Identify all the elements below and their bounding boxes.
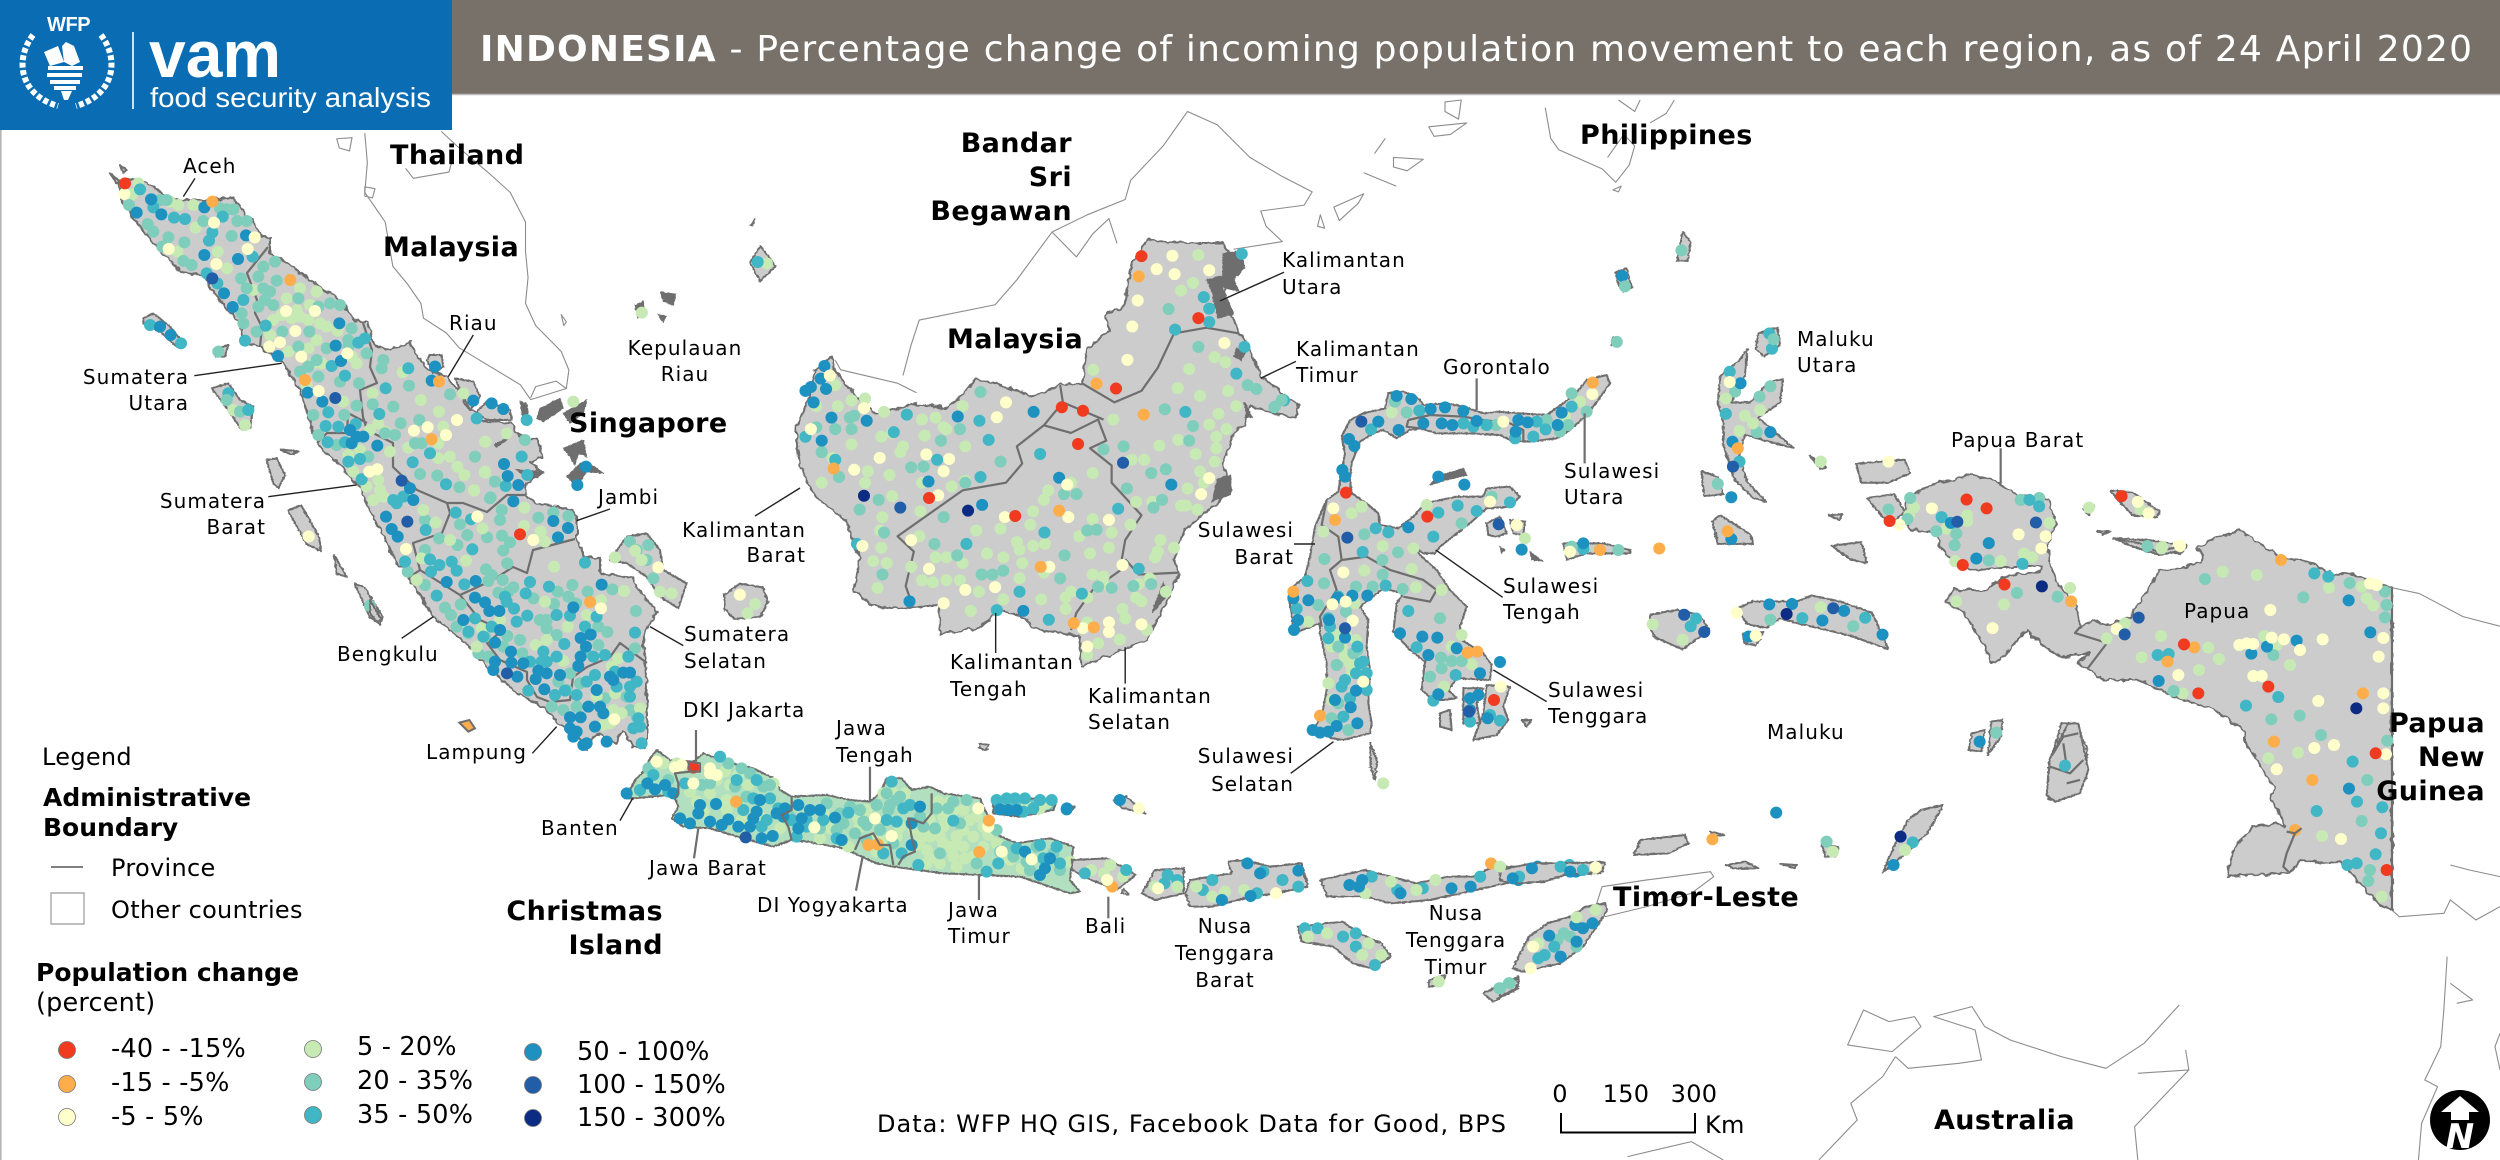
label: Malaysia east: Malaysia [947,324,1083,355]
Sangihe and Talaud islands [1612,268,1632,345]
label: Kalimantan Selatan: Selatan [1088,710,1171,734]
label: Papua Barat: Papua Barat [1951,428,2084,452]
label: Lampung: Lampung [426,740,527,764]
label: Sulawesi Tengah: Sulawesi [1503,574,1599,598]
Java small islands and Bali [979,743,1383,895]
legend subheading: Boundary [43,813,178,842]
label: Sumatera Barat: Barat [206,515,266,539]
region: Papua [1888,462,2392,910]
label: DKI Jakarta: DKI Jakarta [683,698,805,722]
label: Sulawesi Barat: Barat [1234,545,1294,569]
legend item: -15 to -5 [58,1068,230,1098]
label: Malaysia west: Malaysia [383,232,519,263]
label: Nusa Tenggara Barat: Nusa [1198,914,1252,938]
legend item: other countries [51,893,303,924]
label: Jawa Timur: Jawa [946,898,999,922]
legend item: 5 to 20 [304,1032,457,1062]
label: Christmas Island: Christmas [506,896,663,927]
label: Sulawesi Tenggara: Sulawesi [1548,678,1644,702]
label: Kalimantan Timur: Timur [1295,363,1359,387]
label: Kepulauan Riau: Kepulauan [628,336,742,360]
label: Sulawesi Utara: Utara [1564,485,1624,509]
label: Sumatera Utara: Utara [129,391,189,415]
label: Sumatera Selatan: Sumatera [684,622,790,646]
label: Aceh: Aceh [183,154,237,178]
label: Bandar Sri Begawan: Sri [1029,162,1072,193]
header: title band [452,0,2500,94]
label: Riau: Riau [449,311,498,335]
label: Kepulauan Riau: Riau [661,362,709,386]
scale bar: 150 [1603,1080,1649,1108]
scale bar: Km [1705,1111,1745,1139]
label: Nusa Tenggara Barat: Barat [1195,968,1255,992]
icon: WFP emblem wreath and wheat [23,35,111,106]
region: Sumatra [110,165,776,750]
legend item: other countries: Other countries [111,896,303,924]
header: WFP logo panel [0,0,452,130]
label: Timor-Leste: Timor-Leste [1613,882,1799,913]
label: Nusa Tenggara Timur: Timur [1424,955,1487,979]
label: Sumatera Utara: Sumatera [83,365,189,389]
legend: administrative boundary [42,743,303,924]
scale bar: 0 [1552,1080,1568,1108]
legend item: province: Province [111,854,216,882]
small islands west of Sumatra [110,165,298,488]
legend item: 50 to 100: 50 - 100% [577,1037,710,1067]
title: INDONESIA - Percentage change of incoming population movement to each region, as of 24 April 2020 [480,29,2472,70]
region: Sulawesi [1275,375,1630,740]
label: Sulawesi Barat: Sulawesi [1198,518,1294,542]
label: Papua: Papua [2184,599,2250,623]
population dots north Sumatra [124,183,490,503]
label: Maluku Utara: Utara [1797,353,1857,377]
icon: north arrow: N [2446,1117,2474,1157]
label: Sulawesi Selatan: Sulawesi [1198,744,1294,768]
icon: north arrow [2430,1090,2490,1157]
label: Gorontalo: Gorontalo [1443,355,1551,379]
label: Jawa Tengah: Jawa [834,716,887,740]
label: Kalimantan Barat: Kalimantan [682,518,806,542]
label: Papua New Guinea: Guinea [2376,776,2485,807]
legend item: 100 to 150: 100 - 150% [577,1070,726,1100]
label: Bandar Sri Begawan: Bandar [961,128,1072,159]
population dots south Sumatra [405,558,642,745]
legend item: 20 to 35: 20 - 35% [357,1066,473,1096]
label: Singapore: Singapore [569,408,728,439]
legend item: 35 to 50 [304,1100,473,1130]
label: Maluku: Maluku [1767,720,1845,744]
label: Kalimantan Utara: Kalimantan [1282,248,1406,272]
label: Sulawesi Utara: Sulawesi [1564,459,1660,483]
legend unit: (percent) [36,988,155,1018]
legend: population change [36,958,726,1133]
neighbouring countries outlines [337,100,2500,1160]
page frame line [0,130,2,1160]
label: DI Yogyakarta: DI Yogyakarta [757,893,909,917]
legend item: -5 to 5 [58,1102,204,1132]
label: Jawa Timur: Timur [947,924,1011,948]
region: Kalimantan [796,240,1299,666]
label: Nusa Tenggara Timur: Tenggara [1405,928,1506,952]
region: Java [625,750,1080,893]
label: Kalimantan Tengah: Tengah [949,677,1028,701]
label: Sumatera Selatan: Selatan [684,649,767,673]
label: Jawa Tengah: Tengah [835,743,914,767]
label: Sulawesi Tengah: Tengah [1502,600,1581,624]
data source: Data: WFP HQ GIS, Facebook Data for Good, BPS [877,1110,1506,1138]
Riau islands and Bangka [427,355,603,487]
vam wordmark: vam [149,17,281,91]
legend item: 150 to 300: 150 - 300% [577,1103,726,1133]
label: Papua New Guinea: Papua [2389,708,2485,739]
label: Thailand: Thailand [390,140,524,171]
label: Philippines: Philippines [1580,120,1753,151]
legend item: -40 to -15: -40 - -15% [111,1034,246,1064]
label: Nusa Tenggara Barat: Tenggara [1174,941,1275,965]
region: Maluku [1634,232,2087,873]
legend subheading: Administrative [43,783,251,812]
label: Kalimantan Selatan: Kalimantan [1088,684,1212,708]
label: Sumatera Barat: Sumatera [160,489,266,513]
label: Kalimantan Timur: Kalimantan [1296,337,1420,361]
label: Bandar Sri Begawan: Begawan [930,196,1072,227]
scale bar [1552,1080,1745,1139]
legend item: -15 to -5: -15 - -5% [111,1068,230,1098]
leader lines [183,178,2001,918]
WFP wordmark: WFP [47,14,90,36]
legend heading: Population change [36,958,299,987]
label: Sulawesi Tenggara: Tenggara [1547,704,1648,728]
legend item: -5 to 5: -5 - 5% [111,1102,204,1132]
label: Kalimantan Tengah: Kalimantan [950,650,1074,674]
label: Sulawesi Selatan: Selatan [1211,772,1294,796]
label: Papua New Guinea: New [2418,742,2485,773]
scale bar: 300 [1671,1080,1717,1108]
tagline: food security analysis [150,82,431,113]
legend heading: Legend [42,743,132,771]
label: Christmas Island: Island [568,930,663,961]
label: Kalimantan Utara: Utara [1282,275,1342,299]
legend item: 5 to 20: 5 - 20% [357,1032,457,1062]
label: Kalimantan Barat: Barat [746,543,806,567]
legend item: 35 to 50: 35 - 50% [357,1100,473,1130]
region: Nusa Tenggara [1142,860,1607,1002]
label: Maluku Utara: Maluku [1797,327,1875,351]
legend item: 20 to 35 [304,1066,473,1096]
label: Nusa Tenggara Timur: Nusa [1429,901,1483,925]
label: Jambi: Jambi [596,485,659,509]
population dots central Sumatra [386,440,568,551]
label: Bali: Bali [1085,914,1126,938]
label: Australia: Australia [1934,1105,2075,1136]
label: Jawa Barat: Jawa Barat [647,856,767,880]
label: Bengkulu: Bengkulu [337,642,439,666]
label: Banten: Banten [541,816,619,840]
